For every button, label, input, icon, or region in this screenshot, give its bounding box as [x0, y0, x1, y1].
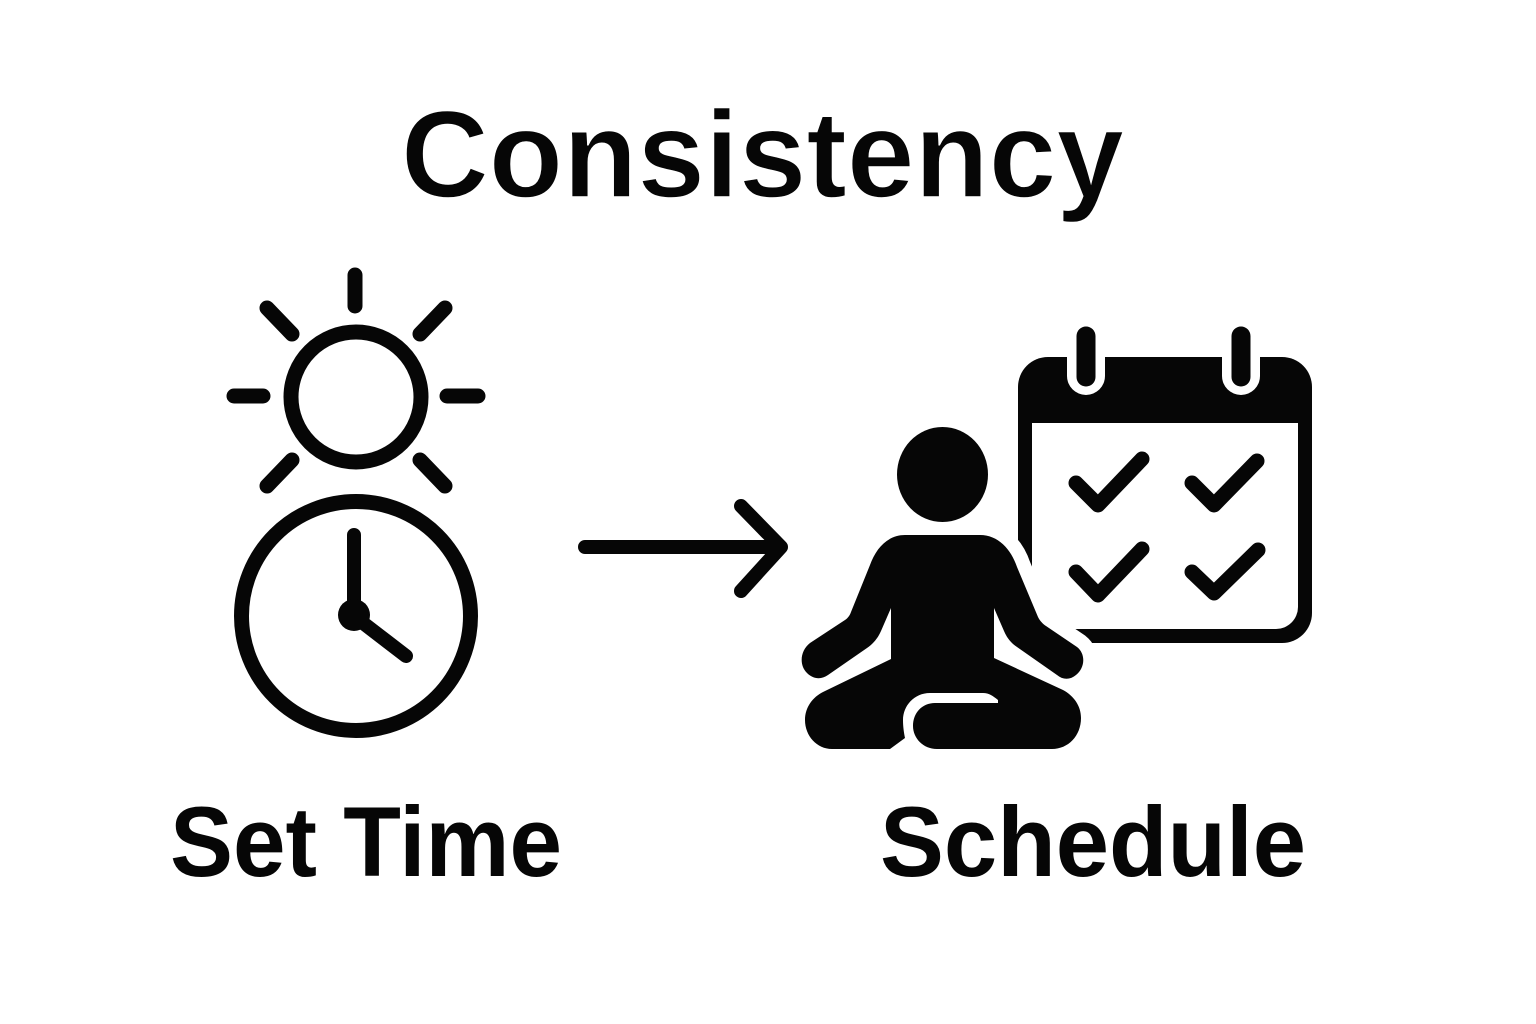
icon: sun — [234, 275, 478, 486]
arrow — [585, 506, 781, 591]
icon: calendar — [1018, 336, 1312, 643]
title: Consistency — [401, 87, 1124, 224]
icon: meditating person — [802, 427, 1083, 749]
calendar rings — [1067, 336, 1260, 395]
label: set time: Set Time — [170, 786, 562, 897]
label: schedule: Schedule — [880, 786, 1306, 897]
calendar check marks — [1076, 459, 1258, 595]
icon: clock — [242, 502, 470, 730]
